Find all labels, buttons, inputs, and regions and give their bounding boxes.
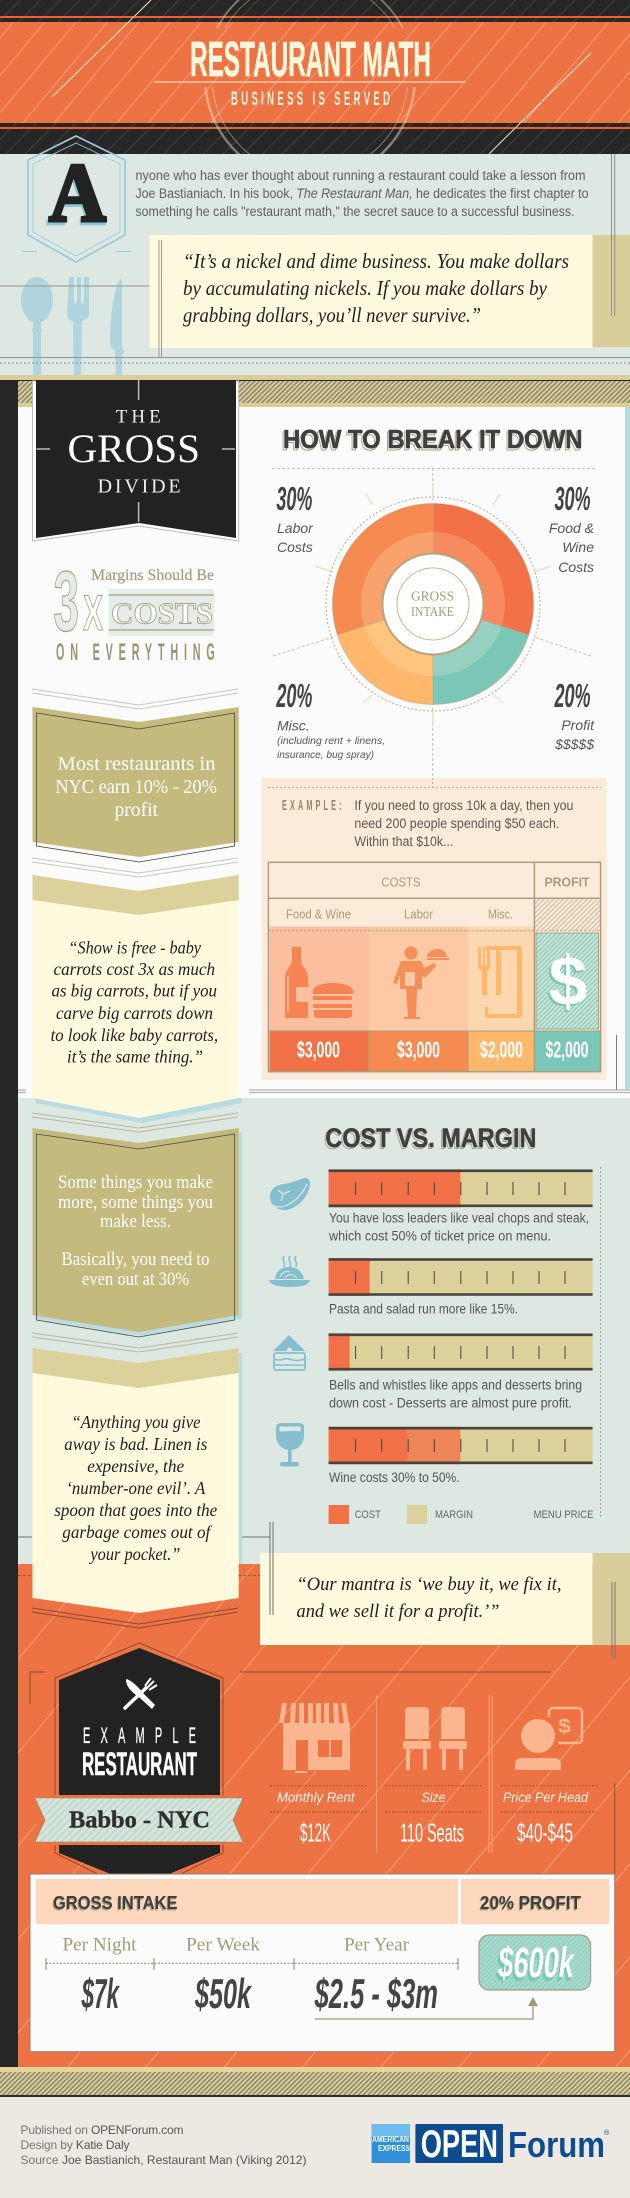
bar: desserts xyxy=(329,1333,593,1410)
callout: some things you make more: Basically, you need to xyxy=(62,1250,210,1270)
panel: gross intake table: Per Year xyxy=(344,1935,410,1956)
callout: 600k profit: $600k xyxy=(495,1943,573,1991)
badge: example restaurant: RESTAURANT xyxy=(82,1746,197,1782)
label: misc 20%: Misc. xyxy=(277,718,310,734)
icon: steak xyxy=(270,1178,310,1210)
quote: baby carrots: it’s the same thing.” xyxy=(67,1047,203,1067)
quote: baby carrots: as big carrots, but if you xyxy=(52,981,217,1001)
quote: baby carrots: to look like baby carrots, xyxy=(51,1025,218,1045)
3x costs callout: Margins Should Be xyxy=(91,567,214,584)
icon: cutlery xyxy=(21,277,124,375)
panel: the gross divide banner: GROSS xyxy=(68,426,200,471)
label: profit 20% xyxy=(554,677,595,752)
label: misc 20%: (including rent + linens, xyxy=(277,735,385,747)
table: cost and profit breakdown: PROFIT xyxy=(544,875,590,890)
badge: example restaurant xyxy=(35,1643,243,1880)
logo: american express open forum: Forum xyxy=(508,2124,605,2165)
label: misc 20%: insurance, bug spray) xyxy=(277,749,374,761)
panel: restaurant stats: Size xyxy=(422,1790,446,1805)
icon: wine glass xyxy=(276,1423,304,1466)
heading: cost vs margin: COST VS. MARGIN xyxy=(324,1124,535,1154)
panel: gross intake table: 20% PROFIT xyxy=(479,1894,580,1914)
icon: price per head xyxy=(515,1708,582,1770)
table: cost and profit breakdown: Misc. xyxy=(488,908,513,922)
icon: price per head: $ xyxy=(558,1716,571,1738)
panel: example: EXAMPLE: xyxy=(282,799,342,814)
label: profit 20%: $$$$$ xyxy=(554,736,594,752)
intro text: something he calls "restaurant math," the secret sauce to a successful business. xyxy=(136,204,574,219)
legend: MARGIN xyxy=(435,1509,473,1521)
panel: example: If you need to gross 10k a day, then you xyxy=(354,798,573,813)
intro text: Joe Bastianiach. In his book, The Restaurant Man, he dedicates the first chapter to xyxy=(136,186,588,201)
icon: chairs xyxy=(403,1707,467,1770)
panel: gross intake table: $50k xyxy=(194,1970,253,2017)
callout: most restaurants xyxy=(32,707,239,862)
label: food and wine costs 30%: 30% xyxy=(554,480,590,517)
bar: steak 50 percent: which cost 50% of ticket price on menu. xyxy=(328,1229,551,1244)
panel: restaurant stats: $12K xyxy=(300,1818,331,1848)
panel: the gross divide banner: THE xyxy=(116,407,161,428)
bar: wine 30 to 50 percent: Wine costs 30% to 50%. xyxy=(329,1470,460,1485)
quote: anything you give away: away is bad. Linen is xyxy=(64,1434,207,1454)
quote: baby carrots: “Show is free - baby xyxy=(68,937,201,957)
table: cost and profit breakdown: COSTS xyxy=(382,875,421,890)
table: cost and profit breakdown: Labor xyxy=(404,908,433,922)
quote: nickel and dime: grabbing dollars, you’ll never survive.” xyxy=(183,303,481,327)
heading: how to break it down: HOW TO BREAK IT DOWN xyxy=(282,426,581,456)
label: profit 20%: Profit xyxy=(561,717,595,733)
heading: how to break it down: HOW TO BREAK IT DOWN xyxy=(283,424,582,454)
quote: our mantra xyxy=(260,1522,630,1659)
icon: wine bottle and burger xyxy=(285,947,353,1018)
label: labor costs 30% xyxy=(276,480,314,555)
callout: some things you make more: even out at 30% xyxy=(82,1270,189,1290)
footer credits xyxy=(20,2123,306,2167)
badge: example restaurant: EXAMPLE xyxy=(83,1723,196,1748)
panel: gross intake table: GROSS INTAKE xyxy=(53,1893,178,1913)
icon: dollar sign: $ xyxy=(546,944,586,1022)
label: food and wine costs 30%: Food & xyxy=(549,520,594,536)
footer credits: Design by Katie Daly xyxy=(20,2138,130,2152)
table: cost and profit breakdown: $2,000 xyxy=(546,1037,588,1063)
panel: gross intake table: GROSS INTAKE xyxy=(52,1894,177,1914)
panel: gross intake table: 20% PROFIT xyxy=(480,1893,581,1913)
ribbon: babbo nyc xyxy=(35,1795,243,1845)
callout: most restaurants: profit xyxy=(114,799,158,821)
logo: american express open forum: OPEN xyxy=(421,2123,498,2166)
logo: american express open forum: AMERICAN xyxy=(372,2135,409,2144)
label: labor costs 30%: 30% xyxy=(276,480,312,517)
quote: baby carrots: carve big carrots down xyxy=(56,1003,213,1023)
quote: anything you give away: ‘number-one evil’. A xyxy=(66,1478,206,1498)
bar: steak 50 percent xyxy=(328,1169,593,1244)
label: misc 20% xyxy=(276,677,385,761)
label: food and wine costs 30%: Wine xyxy=(562,539,594,555)
panel: the gross divide banner: DIVIDE xyxy=(98,476,181,498)
icon: hexagon drop cap xyxy=(22,136,131,262)
label: profit 20%: 20% xyxy=(554,677,590,714)
bar: pasta 15 percent xyxy=(329,1258,593,1317)
quote: anything you give away: garbage comes out of xyxy=(62,1522,213,1542)
bar: desserts: down cost - Desserts are almost pure profit. xyxy=(329,1395,572,1410)
footer credits: Published on OPENForum.com xyxy=(20,2123,184,2137)
quote: our mantra: “Our mantra is ‘we buy it, we fix it, xyxy=(296,1574,562,1595)
intro text xyxy=(136,168,588,219)
panel: cost vs margin xyxy=(269,1123,601,1524)
icon: utensils and plate xyxy=(478,946,522,1018)
quote: anything you give away: expensive, the xyxy=(87,1456,184,1476)
quote: our mantra: and we sell it for a profit.’” xyxy=(296,1601,500,1622)
3x costs callout: X xyxy=(83,585,103,641)
table: cost and profit breakdown: $3,000 xyxy=(397,1037,440,1063)
subtitle: BUSINESS IS SERVED xyxy=(231,89,390,110)
panel: example xyxy=(262,778,607,1080)
logo: american express open forum: ® xyxy=(604,2129,610,2137)
table: cost and profit breakdown: $3,000 xyxy=(297,1037,340,1063)
3x costs callout: COSTS xyxy=(111,595,213,630)
label: food and wine costs 30% xyxy=(549,480,594,575)
callout: most restaurants: Most restaurants in xyxy=(58,753,216,775)
quote: nickel and dime: “It’s a nickel and dime business. You make dollars xyxy=(183,249,569,273)
callout: most restaurants: NYC earn 10% - 20% xyxy=(55,776,217,798)
label: labor costs 30%: Labor xyxy=(277,520,314,536)
bar: wine 30 to 50 percent xyxy=(329,1427,593,1485)
icon: hexagon drop cap: A xyxy=(47,150,105,243)
icon: dollar sign: $ xyxy=(548,942,588,1020)
icon: cake xyxy=(273,1335,305,1370)
legend xyxy=(329,1505,594,1524)
heading: cost vs margin: COST VS. MARGIN xyxy=(325,1123,536,1153)
quote: anything you give away: “Anything you give xyxy=(72,1412,201,1432)
quote: anything you give away: spoon that goes into the xyxy=(54,1500,217,1520)
quote: nickel and dime xyxy=(150,154,630,357)
table: cost and profit breakdown xyxy=(268,862,601,1072)
label: labor costs 30%: Costs xyxy=(277,539,313,555)
panel: the gross divide banner xyxy=(32,380,239,541)
table: cost and profit breakdown: $2,000 xyxy=(480,1037,523,1063)
panel: restaurant stats: Price Per Head xyxy=(503,1790,588,1805)
label: misc 20%: 20% xyxy=(276,677,312,714)
panel: introduction xyxy=(0,136,630,375)
callout: 600k profit: $600k xyxy=(497,1939,575,1987)
quote: nickel and dime: by accumulating nickels. If you make dollars by xyxy=(183,276,548,300)
quote: baby carrots: carrots cost 3x as much xyxy=(54,959,215,979)
panel: example: Within that $10k... xyxy=(354,834,453,849)
table: cost and profit breakdown: Food & Wine xyxy=(286,908,351,922)
callout: 600k profit xyxy=(479,1935,591,1991)
label: food and wine costs 30%: Costs xyxy=(558,559,594,575)
panel: restaurant stats: Monthly Rent xyxy=(277,1790,356,1805)
callout: some things you make more: make less. xyxy=(100,1212,171,1232)
icon: pasta bowl xyxy=(269,1256,310,1287)
3x costs callout: ON EVERYTHING xyxy=(56,638,215,665)
icon: waiter with tray xyxy=(393,946,449,1019)
callout: some things you make more xyxy=(32,1113,242,1337)
bar: steak 50 percent: You have loss leaders like veal chops and steak, xyxy=(329,1211,589,1226)
3x costs callout: 3 xyxy=(53,555,79,650)
panel: gross intake table xyxy=(30,1874,615,2052)
footer credits: Source Joe Bastianich, Restaurant Man (Viking 2012) xyxy=(20,2153,306,2167)
donut chart: gross intake: GROSS xyxy=(411,589,454,604)
3x costs callout xyxy=(53,555,215,665)
donut chart: gross intake: INTAKE xyxy=(411,604,454,619)
panel: restaurant stats: $40-$45 xyxy=(517,1818,573,1848)
arrow: yearly to profit xyxy=(315,1997,538,2019)
callout: some things you make more: Some things you make xyxy=(58,1173,213,1193)
icon: crossed fork and knife xyxy=(125,1678,157,1709)
bar: pasta 15 percent: Pasta and salad run more like 15%. xyxy=(329,1302,518,1317)
panel: example: need 200 people spending $50 each. xyxy=(354,816,559,831)
callout: some things you make more: more, some things you xyxy=(58,1193,213,1213)
panel: restaurant stats: 110 Seats xyxy=(400,1818,464,1848)
logo: american express open forum: EXPRESS xyxy=(378,2144,411,2153)
ribbon: babbo nyc: Babbo - NYC xyxy=(69,1808,210,1834)
legend: MENU PRICE xyxy=(534,1509,594,1521)
panel: gross intake table: Per Night xyxy=(62,1935,137,1956)
panel: gross intake table: $7k xyxy=(81,1970,120,2017)
logo: american express open forum xyxy=(372,2123,610,2166)
quote: baby carrots xyxy=(32,875,242,1123)
quote: anything you give away xyxy=(32,1348,242,1613)
donut chart: gross intake xyxy=(272,468,595,787)
intro text: nyone who has ever thought about running a restaurant could take a lesson from xyxy=(136,168,586,183)
panel: gross intake table: Per Week xyxy=(186,1935,261,1956)
header banner xyxy=(0,0,630,154)
icon: hexagon drop cap: A xyxy=(49,147,106,240)
icon: storefront xyxy=(279,1703,350,1773)
panel: gross intake table: $2.5 - $3m xyxy=(314,1970,438,2017)
panel: restaurant stats xyxy=(270,1695,598,1853)
quote: anything you give away: your pocket.” xyxy=(89,1544,180,1564)
bar: desserts: Bells and whistles like apps and desserts bring xyxy=(329,1377,582,1392)
legend: COST xyxy=(355,1509,381,1521)
